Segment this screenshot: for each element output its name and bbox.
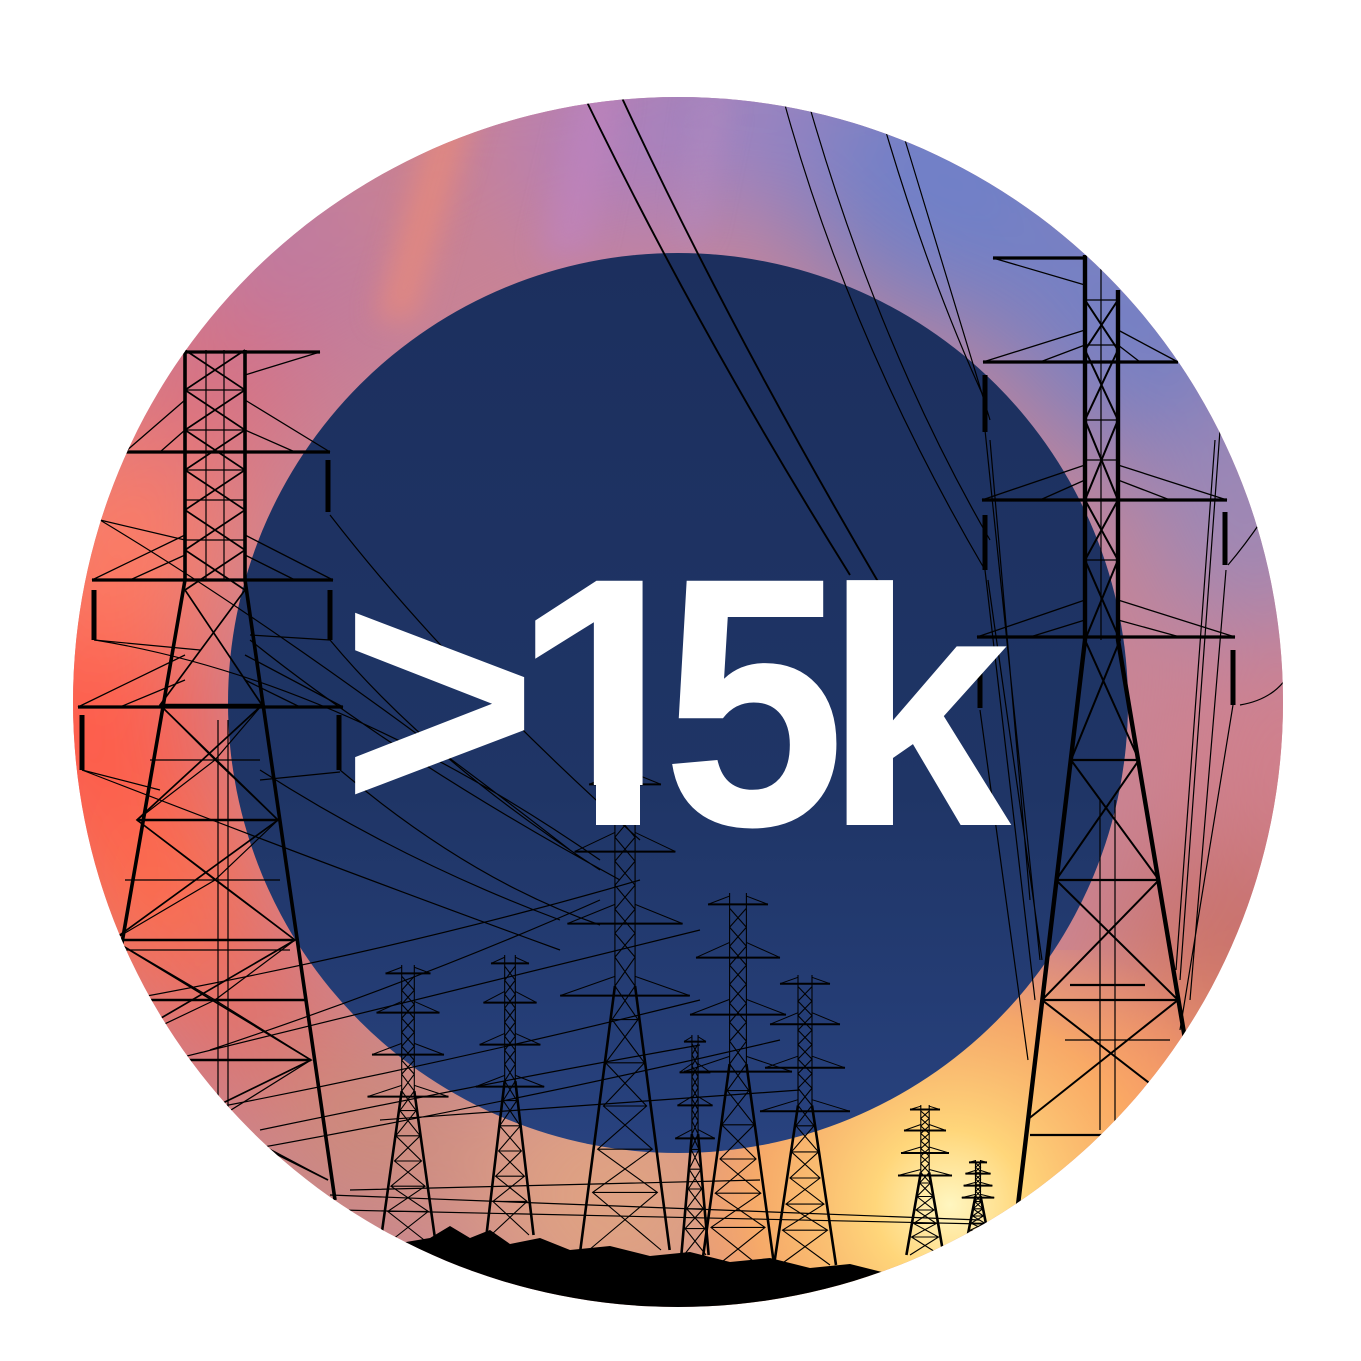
headline number: 5 — [662, 504, 846, 901]
sunset sky photo background — [73, 97, 1283, 1307]
dark ground silhouette — [406, 1226, 882, 1307]
headline number: k — [823, 519, 1013, 897]
navy inner circle — [228, 253, 1128, 1153]
distant pylons — [368, 770, 994, 1273]
power lines — [82, 98, 1285, 1225]
right large pylon — [977, 255, 1235, 1205]
infographic graphic — [73, 97, 1283, 1307]
headline number: > — [341, 511, 538, 887]
left large pylon — [78, 349, 344, 1200]
headline number — [355, 580, 1012, 828]
headline number: 1 — [511, 505, 708, 901]
